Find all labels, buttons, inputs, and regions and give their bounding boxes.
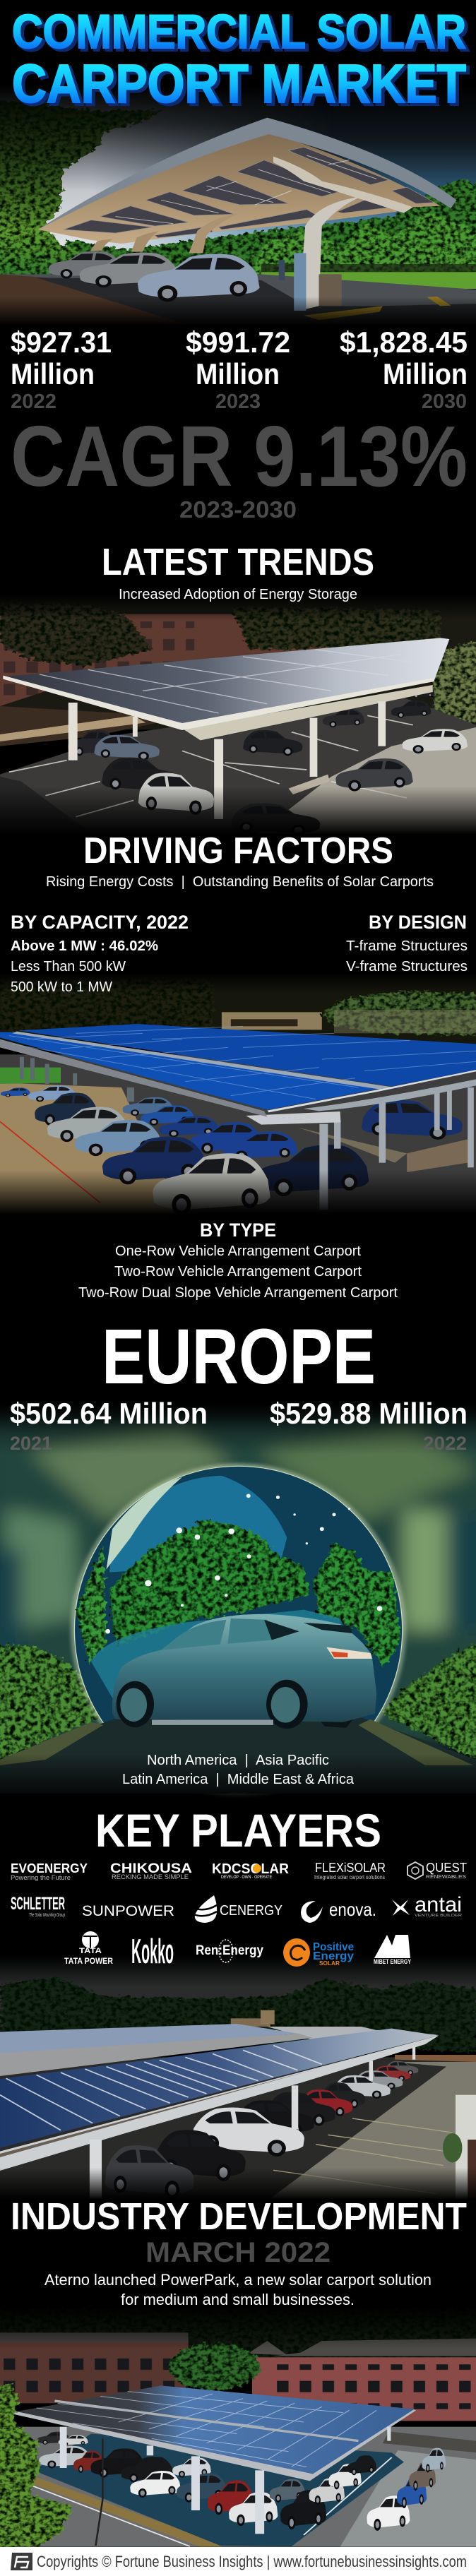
by capacity	[11, 912, 189, 995]
logo: Enova	[301, 1899, 376, 1923]
columns	[60, 2427, 391, 2534]
parked cars	[105, 2061, 418, 2199]
logo: Chikousa: CHIKOUSA	[110, 1861, 192, 1876]
by design: T-frame Structures	[346, 938, 468, 954]
by design	[346, 912, 468, 974]
grass and ground	[261, 272, 476, 289]
rear solar array	[0, 2024, 299, 2054]
footer	[0, 2547, 476, 2576]
logos: key players	[11, 1861, 467, 1971]
cars	[49, 251, 121, 278]
regions text	[122, 1753, 355, 1787]
logo: Tata Power: TATA POWER	[64, 1956, 113, 1966]
stat: 2030: 2030	[422, 390, 467, 413]
logo: Antai	[392, 1893, 463, 1918]
planter	[288, 775, 330, 794]
carport columns	[90, 196, 362, 311]
by type: BY TYPE	[200, 1220, 276, 1241]
development text: for medium and small businesses.	[121, 2291, 355, 2308]
logo: Cenergy	[194, 1895, 282, 1923]
heading: Europe: EUROPE	[102, 1313, 376, 1400]
logo: Flexisolar: FLEXiSOLAR	[315, 1861, 386, 1875]
logo: Flexisolar: Integrated solar carport solutions	[314, 1874, 385, 1880]
logo: Tata Power: TATA	[79, 1947, 102, 1955]
parked cars	[1, 1085, 463, 1215]
right-hand building and bush	[456, 2095, 476, 2201]
image: blue solar carport	[0, 972, 476, 1222]
cars under roof	[410, 688, 434, 698]
logo: Cenergy: CENERGY	[220, 1903, 282, 1919]
roof light area	[267, 2027, 439, 2041]
logo: KDC Solar: DEVELOP · OWN · OPERATE	[221, 1876, 272, 1880]
roof frame	[3, 676, 434, 730]
trend text: Increased Adoption of Energy Storage	[119, 587, 357, 602]
stat: 2023: 2023	[215, 390, 261, 413]
logo: SunPower: SUNPOWER	[82, 1903, 174, 1919]
logo: Chikousa	[110, 1861, 192, 1880]
stat: Europe 2022	[270, 1397, 468, 1454]
logo: Quest Renewables: RENEWABLES	[426, 1875, 466, 1880]
heading: driving factors: DRIVING FACTORS	[83, 830, 393, 871]
white panel lines	[115, 155, 376, 224]
image: globe and electric car	[0, 1379, 476, 1803]
by capacity: 500 kW to 1 MW	[11, 979, 112, 995]
by design: V-frame Structures	[346, 959, 468, 974]
buildings	[0, 2339, 189, 2403]
by type: Two-Row Dual Slope Vehicle Arrangement Carport	[78, 1285, 398, 1301]
logo: Positive Energy Solar: SOLAR	[319, 1960, 340, 1967]
regions text: North America | Asia Pacific	[147, 1753, 329, 1768]
logo: Positive Energy Solar: Positive	[313, 1941, 354, 1953]
globe	[71, 1463, 406, 1796]
hero bottom fade	[0, 297, 476, 326]
lamp post	[95, 2438, 102, 2546]
columns	[90, 2046, 415, 2198]
by type: One-Row Vehicle Arrangement Carport	[115, 1244, 361, 1259]
image: carport with blue-gray roof	[0, 1956, 476, 2204]
solar panels under roof	[64, 147, 434, 238]
front solar array	[0, 2029, 439, 2148]
logos: key players: Kokko	[131, 1933, 174, 1971]
logo: Enova: enova.	[329, 1899, 376, 1920]
brick building	[0, 614, 334, 706]
parked cars	[37, 2432, 446, 2531]
blue solar arrays	[0, 1032, 380, 1110]
solar canopy	[17, 2385, 415, 2474]
stat: 2023: $991.72	[186, 326, 290, 359]
hills	[0, 1638, 476, 1760]
logo: Positive Energy Solar	[283, 1938, 354, 1967]
regions text: Latin America | Middle East & Africa	[122, 1772, 355, 1787]
solar roof	[3, 638, 449, 726]
stat: 2022	[11, 326, 112, 413]
logo: Mibet Energy: MIBET ENERGY	[374, 1958, 411, 1965]
slatted underside	[182, 685, 433, 740]
tree line	[0, 1977, 476, 2053]
stat: 2030	[340, 326, 468, 413]
stat: 2022: $927.31	[11, 326, 112, 359]
tree backdrop	[0, 2309, 476, 2361]
logo: Tata Power	[64, 1931, 113, 1966]
stat: Europe 2022: $529.88 Million	[270, 1397, 468, 1430]
title	[12, 5, 469, 117]
image: aerial carport by brick buildings	[0, 2304, 476, 2547]
stat: 2023: Million	[196, 357, 280, 390]
stat: Europe 2021	[10, 1397, 208, 1454]
logo: Evoenergy: EVOENERGY	[11, 1861, 88, 1876]
development text: Aterno launched PowerPark, a new solar carport solution	[44, 2271, 432, 2289]
hero image: solar carport	[0, 85, 476, 325]
logo: Antai: VENTURE BUILDER	[415, 1914, 463, 1918]
globe land	[76, 1520, 401, 1667]
background trees and building	[222, 1012, 322, 1030]
logo: Schletter	[11, 1894, 65, 1918]
image: white-roof carport parking	[0, 595, 476, 841]
logo: Antai: antai	[415, 1893, 462, 1916]
front columns	[319, 1087, 474, 1210]
heading: key players: KEY PLAYERS	[95, 1804, 381, 1856]
stat: Europe 2021: 2021	[10, 1433, 52, 1454]
road	[0, 1717, 476, 1794]
electric car	[112, 1614, 376, 1729]
logo: Quest Renewables: QUEST	[426, 1861, 467, 1875]
stat: 2023	[186, 326, 290, 413]
roof edge	[38, 118, 456, 229]
stat: Europe 2021: $502.64 Million	[10, 1397, 208, 1430]
eave	[0, 2036, 439, 2171]
white beam	[273, 157, 413, 213]
logo: KDC Solar: KDCSOLAR	[212, 1861, 290, 1877]
by type: Two-Row Vehicle Arrangement Carport	[114, 1264, 362, 1280]
underside frame	[12, 2409, 416, 2481]
logo: Chikousa: RECKING MADE SIMPLE	[112, 1873, 189, 1880]
date: March 2022: MARCH 2022	[145, 2237, 331, 2268]
CAGR: 2023-2030	[179, 496, 297, 523]
logo: Evoenergy	[11, 1861, 88, 1881]
by design: BY DESIGN	[369, 912, 467, 933]
stat: 2030: $1,828.45	[340, 326, 468, 359]
logo: Evoenergy: Powering the Future	[11, 1874, 71, 1881]
heading: latest trends: LATEST TRENDS	[102, 541, 374, 583]
by capacity: Above 1 MW : 46.02%	[11, 938, 158, 954]
stat: Europe 2022: 2022	[423, 1433, 467, 1454]
by capacity: Less Than 500 kW	[11, 959, 126, 974]
ground	[0, 1054, 476, 1215]
blurred forest background	[0, 1417, 476, 1748]
logo: Schletter: The Solar Mounting Group	[29, 1913, 65, 1918]
stat: 2022: Million	[11, 357, 95, 390]
logo: Flexisolar	[314, 1861, 386, 1880]
logo: Schletter: SCHLETTER	[11, 1894, 65, 1914]
globe stars	[105, 1494, 382, 1633]
logo: Mibet Energy	[374, 1935, 411, 1965]
parking lot ground	[0, 694, 476, 838]
development text	[44, 2271, 432, 2308]
logo: RenEnergy: Ren:Energy	[196, 1943, 263, 1958]
ground	[0, 2427, 476, 2547]
logo: RenEnergy	[196, 1940, 263, 1962]
icon: Fortune Business Insights logo	[11, 2553, 32, 2570]
logo: Quest Renewables	[407, 1861, 467, 1880]
columns	[69, 701, 386, 819]
driving factors text: Rising Energy Costs | Outstanding Benefits of Solar Carports	[46, 874, 434, 890]
stat: 2022: 2022	[11, 390, 56, 413]
lot ground	[0, 2057, 476, 2201]
by type	[78, 1220, 398, 1301]
by capacity: BY CAPACITY, 2022	[11, 912, 189, 933]
globe sky light	[109, 1476, 287, 1573]
stat: 2030: Million	[383, 357, 468, 390]
far columns	[20, 1057, 134, 1102]
planter wall	[407, 1139, 468, 1172]
logo: Positive Energy Solar: Energy	[313, 1950, 354, 1962]
trees behind carport	[0, 99, 476, 278]
tree in foreground	[0, 2385, 73, 2547]
roof beams	[246, 1111, 340, 1125]
roof underside	[38, 132, 441, 244]
